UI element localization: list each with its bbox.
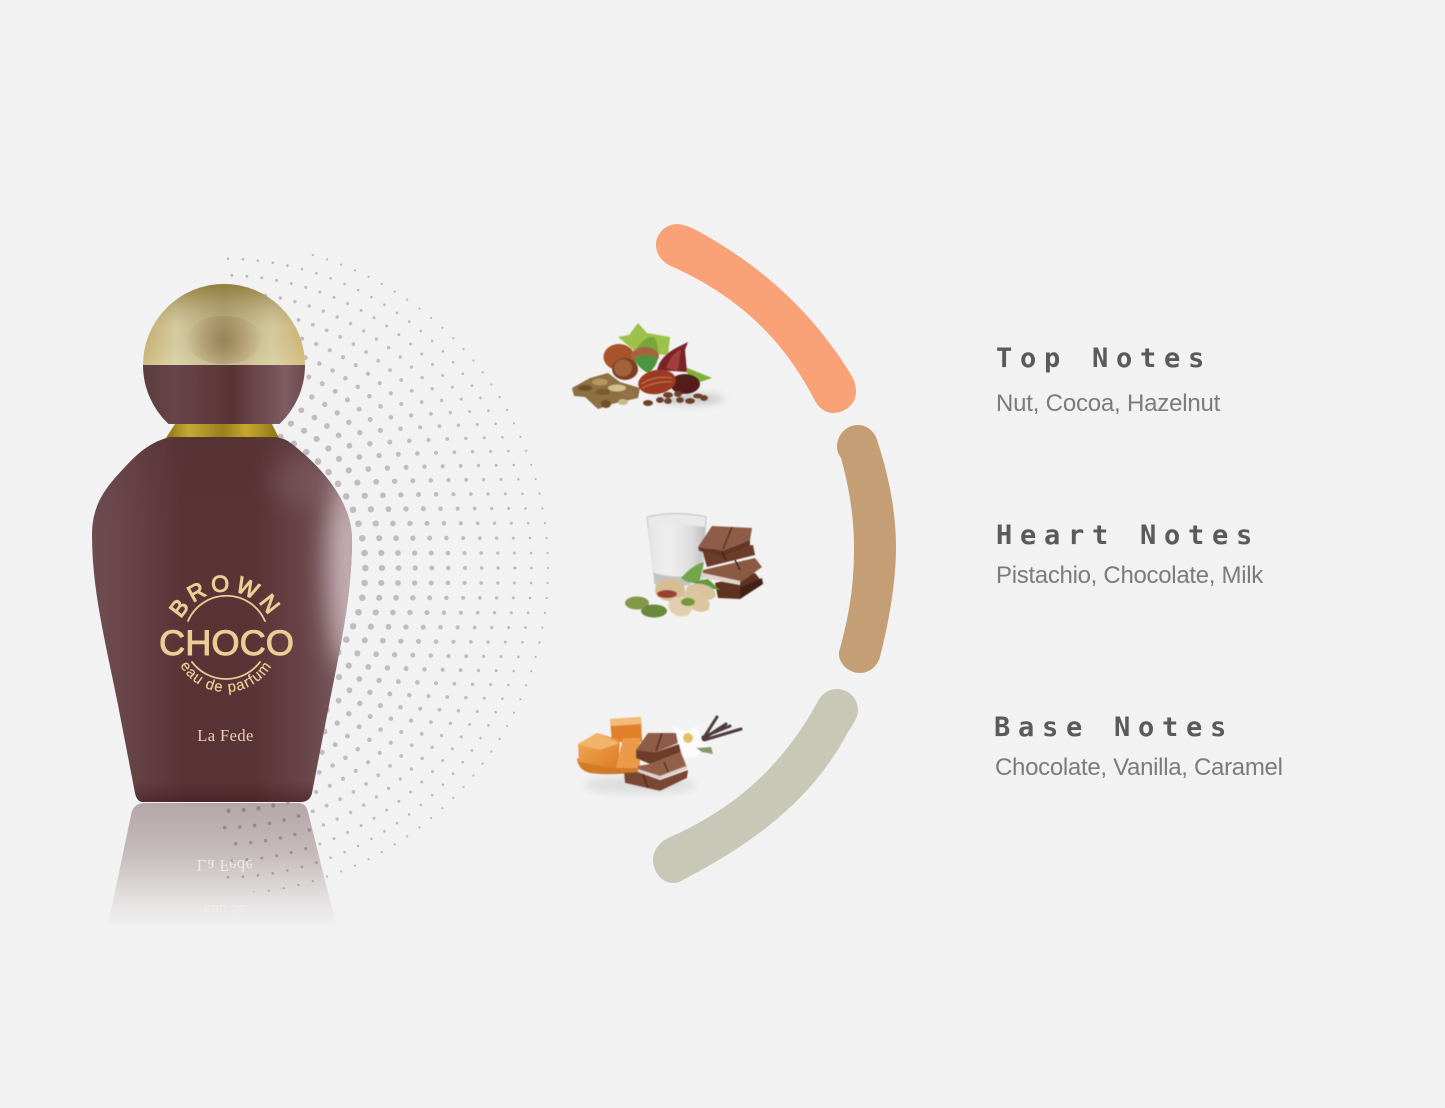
- chocolate stack: [698, 526, 763, 599]
- base notes text: Base Notes: [994, 712, 1234, 743]
- top notes text: [996, 343, 1221, 417]
- milk glass: [647, 514, 706, 586]
- heart notes arc: [837, 425, 896, 673]
- top notes arc: [656, 224, 856, 413]
- logo: Brown Choco: BROWN: [168, 575, 281, 618]
- heart notes text: Pistachio, Chocolate, Milk: [996, 562, 1264, 589]
- base notes text: [994, 712, 1283, 781]
- icon: milk, chocolate and pistachio: [625, 514, 763, 620]
- pistachios: [625, 562, 720, 620]
- logo: Brown Choco: [159, 575, 294, 696]
- brand: La Fede: La Fede: [197, 726, 254, 745]
- bottle body: [88, 434, 368, 806]
- chocolate stack: [624, 733, 688, 791]
- cocoa beans: [643, 391, 708, 406]
- icon: nuts and cocoa: [572, 323, 724, 409]
- flower and vanilla: [673, 717, 741, 758]
- logo: Brown Choco: eau de parfum: [181, 662, 272, 696]
- perfume bottle: [92, 284, 352, 802]
- top notes text: Nut, Cocoa, Hazelnut: [996, 390, 1221, 417]
- bottle reflection: [108, 803, 336, 925]
- top notes text: Top Notes: [996, 343, 1212, 374]
- crumbled nuts: [572, 373, 640, 409]
- bottle neck ring: [166, 424, 279, 438]
- halftone dot sphere: [222, 242, 548, 894]
- heart notes text: Heart Notes: [996, 520, 1260, 551]
- bottle reflection: La Fede: [197, 856, 253, 875]
- base notes arc: [653, 689, 858, 883]
- icon: caramel, chocolate and vanilla: [577, 717, 741, 794]
- caramel cubes: [577, 717, 642, 774]
- heart notes text: [996, 520, 1264, 589]
- base notes text: Chocolate, Vanilla, Caramel: [995, 754, 1283, 781]
- gold dome cap: [143, 284, 305, 365]
- logo: Brown Choco: CHOCO: [159, 624, 294, 663]
- cap lower band: [143, 365, 305, 424]
- bottle reflection: eau de: [204, 902, 247, 918]
